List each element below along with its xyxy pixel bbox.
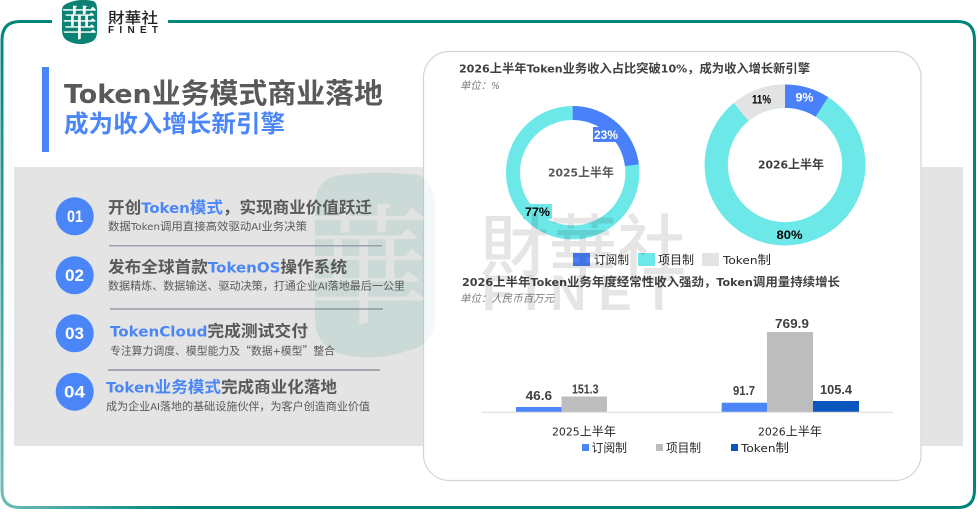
bars: [516, 332, 859, 412]
chart title: revenue share: 2026上半年Token业务收入占比突破10%，成为收入增长新引擎: [459, 61, 810, 76]
item 03: TokenCloud 完成测试交付: [110, 322, 308, 341]
bar chart section: [460, 274, 893, 455]
chart title: recurring revenue: 2026上半年Token业务年度经常性收入强劲， Token调用量持续增长: [462, 274, 840, 289]
bar values: 105.4: [820, 382, 853, 397]
item 03: [56, 314, 335, 359]
bar values: 91.7: [733, 383, 755, 398]
item 01: 01: [67, 208, 83, 226]
unit label: 单位：%: [460, 80, 500, 92]
item 04: Token业务模式完成商业化落地: [106, 378, 337, 397]
donut 2025 labels: 77%: [525, 205, 550, 219]
axis labels: 2026上半年: [758, 425, 822, 439]
bar values: 46.6: [526, 388, 552, 403]
item 04: 04: [64, 384, 86, 402]
watermark logo: 華: [298, 162, 430, 352]
donut 2026 labels: 9%: [796, 91, 814, 105]
donut legend: Token 制: [722, 253, 771, 267]
donut 2026 labels: 2026上半年: [758, 157, 824, 172]
donut chart section: [459, 61, 882, 267]
item 01: 数据Token调用直接高效驱动 AI业务决策: [108, 219, 307, 233]
donut 2026 labels: [752, 91, 824, 242]
title block: 成为收入增长新引擎: [64, 110, 285, 138]
item 01: [56, 197, 372, 235]
list panel: [56, 197, 405, 413]
bar legend: [582, 441, 789, 455]
axis labels: 2025上半年: [552, 425, 616, 439]
donut 2025 labels: [523, 127, 619, 219]
bar values: 151.3: [572, 382, 598, 396]
panel: charts card: [424, 52, 921, 480]
donut 2025 labels: 23%: [594, 128, 618, 142]
donut legend: 订阅制: [594, 253, 629, 267]
donut legend: 项目制: [658, 253, 694, 267]
logo: FINET: [108, 25, 158, 36]
item 02: 02: [65, 267, 84, 285]
donut legend: [573, 253, 771, 267]
bar values: [526, 316, 853, 403]
grey band: [14, 167, 963, 446]
bar legend: Token 制: [740, 441, 789, 455]
item 02: 发布全球首款 TokenOS操作系统: [108, 258, 347, 277]
item 01: 开创Token模式，实现商业价值跃迁: [108, 198, 372, 217]
item 03: 专注算力调度、模型能力及“数据+模型”整合: [110, 343, 335, 359]
unit label: 单位：人民币百万元: [460, 293, 556, 305]
donut 2026: [688, 68, 882, 262]
donut 2026 labels: 11%: [752, 92, 771, 106]
bar values: 769.9: [775, 316, 809, 331]
title block: Token业务模式商业落地: [64, 77, 383, 110]
item 02: [56, 256, 405, 294]
logo: [61, 0, 158, 47]
bar legend: 项目制: [666, 441, 701, 455]
donut 2025 labels: 2025上半年: [548, 165, 614, 180]
bar legend: 订阅制: [592, 441, 627, 455]
logo: 財華社: [108, 7, 158, 28]
axis labels: [552, 425, 822, 439]
item 04: [56, 373, 370, 413]
donut 2026 labels: 80%: [776, 228, 803, 242]
watermark text: 財華社: [480, 192, 686, 291]
item 02: 数据精炼、数据输送、驱动决策，打通企业AI落地最后一公里: [108, 278, 405, 292]
item 04: 成为企业AI落地的基础设施伙伴，为客户创造商业价值: [106, 399, 370, 413]
item 03: 03: [65, 325, 84, 343]
donut 2025: [513, 113, 632, 232]
watermark text: FINET: [482, 265, 674, 321]
title block: [42, 67, 383, 152]
